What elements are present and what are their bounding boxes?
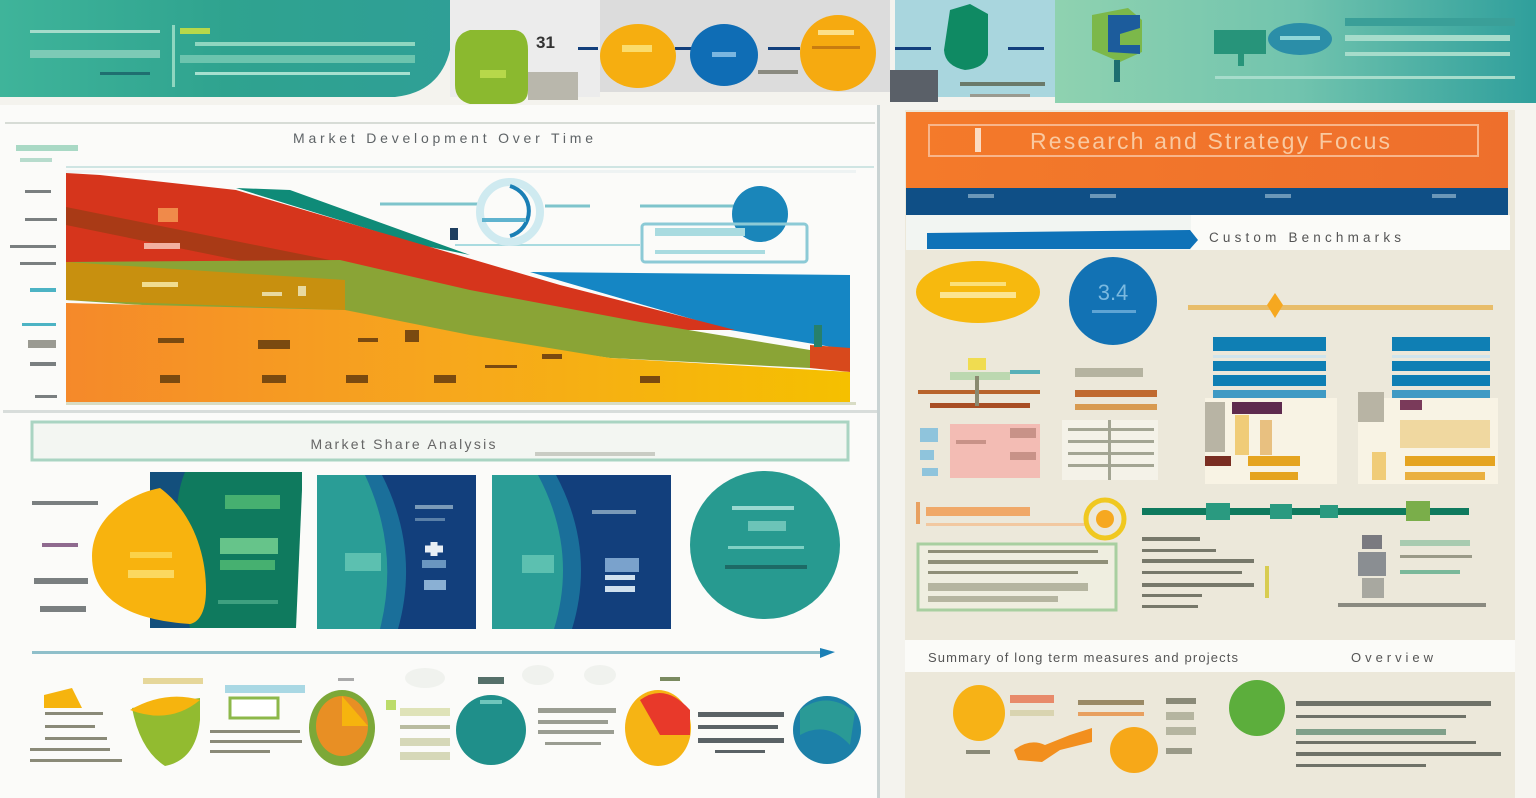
- header: orange banner: [906, 112, 1508, 215]
- darker strip: [66, 207, 345, 282]
- item: teal sphere: [456, 677, 526, 765]
- orange area: [66, 303, 850, 403]
- chart legend labels: [10, 145, 78, 398]
- footer heading bar: Overview: [1351, 650, 1434, 665]
- item: green bowl: [130, 678, 203, 766]
- icon: small tree: [814, 325, 822, 347]
- heading: area chart: Market Development Over Time: [293, 130, 593, 146]
- item: dark text: [698, 712, 784, 753]
- panel: left main: [0, 105, 880, 798]
- panel: right main: [905, 110, 1536, 798]
- icon: green shield: [944, 4, 988, 70]
- text box: bordered note: [918, 544, 1116, 610]
- text list: [1142, 537, 1269, 608]
- table: outline: [1062, 420, 1158, 480]
- badge: blue circle: [1069, 257, 1157, 345]
- icon: blue and green tree: [1092, 8, 1142, 62]
- slider: [1188, 293, 1493, 318]
- red corner: [810, 345, 850, 372]
- chart annotations: [380, 182, 807, 262]
- icon: green node: [455, 30, 528, 104]
- icon: person with notes: [1338, 535, 1486, 607]
- sea area: [530, 272, 850, 350]
- item: gray text: [538, 708, 616, 745]
- item: orange sphere: [309, 678, 375, 766]
- mini chart: tree: [918, 358, 1040, 408]
- callout: orange label with sun icon: [916, 500, 1124, 538]
- icon: yellow node: [600, 24, 676, 88]
- teal wedge: [236, 188, 470, 255]
- footer heading bar: [928, 650, 1434, 665]
- red area: [66, 173, 735, 330]
- divider arrow: [32, 648, 835, 658]
- card: teal and navy 1: [317, 475, 476, 629]
- data labels: [158, 330, 660, 383]
- bar chart: striped blue: [1205, 337, 1337, 484]
- item: red and yellow sphere: [625, 677, 691, 766]
- panel: comparison section: [3, 410, 877, 629]
- top banner: [0, 0, 1536, 104]
- icon: blue node: [690, 24, 758, 86]
- timeline connector: [578, 47, 1044, 50]
- timeline: green: [1142, 501, 1469, 521]
- mini chart: stacked rows: [1075, 368, 1157, 410]
- card: yellow and green: [92, 472, 302, 628]
- footer heading bar: Summary of long term measures and projects: [928, 650, 1238, 665]
- badge: blue circle: 3.4: [1098, 280, 1128, 305]
- subheader bar: Custom Benchmarks: [1209, 230, 1401, 245]
- footer flow diagram: [953, 680, 1285, 773]
- bar chart: striped blue right: [1358, 337, 1498, 484]
- item: labelled box: [210, 685, 305, 753]
- icon: orange node: [800, 15, 876, 91]
- badge: yellow oval: [916, 261, 1040, 323]
- footer text block: [1296, 701, 1501, 767]
- card: teal and navy 2: [492, 475, 671, 629]
- heading: comparison: Market Share Analysis: [310, 436, 496, 452]
- card: teal circle: [690, 471, 840, 619]
- top banner: 31: [536, 33, 555, 52]
- olive area: [66, 260, 810, 368]
- item: blue sphere: [793, 696, 861, 764]
- icon row: [30, 665, 861, 766]
- area chart: [66, 166, 874, 405]
- subheader bar: [906, 215, 1510, 250]
- table: pink: [920, 424, 1040, 478]
- header: orange banner: Research and Strategy Focus: [1030, 128, 1390, 154]
- icon: teal signs: [1214, 30, 1266, 54]
- item: text block: [386, 700, 450, 760]
- item: folder note: [30, 688, 122, 762]
